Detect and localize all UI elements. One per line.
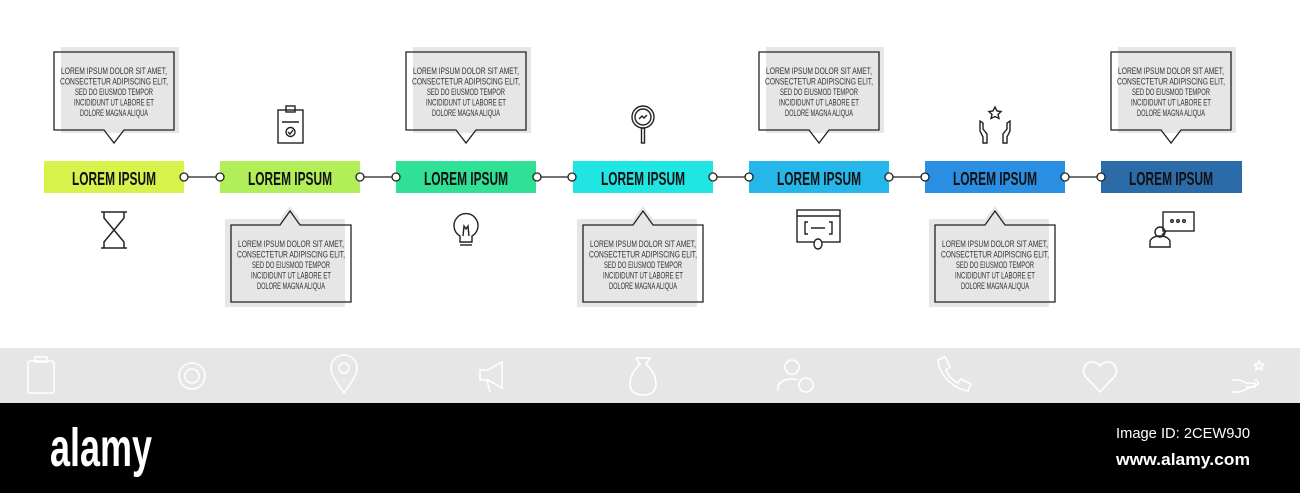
icon: certificate xyxy=(797,210,840,249)
callout top 3: SED DO EIUSMOD TEMPOR xyxy=(427,87,505,97)
callout top 3: CONSECTETUR ADIPISCING ELIT, xyxy=(412,76,520,86)
step 1 bar: LOREM IPSUM xyxy=(72,169,156,189)
callout top 5: INCIDIDUNT UT LABORE ET xyxy=(779,98,859,108)
callout top 7: CONSECTETUR ADIPISCING ELIT, xyxy=(1117,76,1225,86)
step 7 bar xyxy=(1101,161,1242,193)
callout top 5 xyxy=(759,47,884,143)
footer: alamy watermark bar: www.alamy.com xyxy=(1115,450,1250,469)
step 1 bar xyxy=(44,161,184,193)
callout top 3 xyxy=(406,47,531,143)
callout bottom 2: SED DO EIUSMOD TEMPOR xyxy=(252,260,330,270)
callout bottom 2: DOLORE MAGNA ALIQUA xyxy=(257,281,325,291)
callout top 5: LOREM IPSUM DOLOR SIT AMET, xyxy=(766,66,872,76)
step 3 bar: LOREM IPSUM xyxy=(424,169,508,189)
callout bottom 6: INCIDIDUNT UT LABORE ET xyxy=(955,270,1035,280)
callout top 3: INCIDIDUNT UT LABORE ET xyxy=(426,98,506,108)
callout top 7: SED DO EIUSMOD TEMPOR xyxy=(1132,87,1210,97)
step 5 bar xyxy=(749,161,889,193)
step 4 bar: LOREM IPSUM xyxy=(601,169,685,189)
callout bottom 2 xyxy=(225,206,351,307)
step 2 bar: LOREM IPSUM xyxy=(248,169,332,189)
step 5 bar: LOREM IPSUM xyxy=(777,169,861,189)
step 6 bar xyxy=(925,161,1065,193)
callout top 5: DOLORE MAGNA ALIQUA xyxy=(785,108,853,118)
step 6 bar: LOREM IPSUM xyxy=(953,169,1037,189)
icon: clipboard xyxy=(278,106,303,143)
callout top 1: DOLORE MAGNA ALIQUA xyxy=(80,108,148,118)
callout bottom 6: SED DO EIUSMOD TEMPOR xyxy=(956,260,1034,270)
callout bottom 6 xyxy=(929,206,1055,307)
callout top 7 xyxy=(1111,47,1236,143)
footer: alamy watermark bar: alamy xyxy=(50,418,152,478)
callout bottom 4: INCIDIDUNT UT LABORE ET xyxy=(603,270,683,280)
connector nodes xyxy=(180,173,1105,181)
callout bottom 2: INCIDIDUNT UT LABORE ET xyxy=(251,270,331,280)
callout top 3: DOLORE MAGNA ALIQUA xyxy=(432,108,500,118)
icon: light bulb xyxy=(454,214,478,245)
icon: hourglass xyxy=(101,212,127,248)
icon: hands star xyxy=(980,107,1010,143)
callout bottom 4: LOREM IPSUM DOLOR SIT AMET, xyxy=(590,239,696,249)
step 7 bar: LOREM IPSUM xyxy=(1129,169,1213,189)
callout top 1: INCIDIDUNT UT LABORE ET xyxy=(74,98,154,108)
callout top 1 xyxy=(54,47,179,143)
callout bottom 4: CONSECTETUR ADIPISCING ELIT, xyxy=(589,250,697,260)
callout bottom 4: SED DO EIUSMOD TEMPOR xyxy=(604,260,682,270)
footer: alamy watermark bar xyxy=(0,403,1300,493)
callout top 1: SED DO EIUSMOD TEMPOR xyxy=(75,87,153,97)
callout top 1: CONSECTETUR ADIPISCING ELIT, xyxy=(60,76,168,86)
callout bottom 6: LOREM IPSUM DOLOR SIT AMET, xyxy=(942,239,1048,249)
connector line xyxy=(184,176,1101,178)
footer: alamy watermark bar: Image ID: 2CEW9J0 xyxy=(1116,425,1250,442)
step 4 bar xyxy=(573,161,713,193)
callout bottom 6: DOLORE MAGNA ALIQUA xyxy=(961,281,1029,291)
step 3 bar xyxy=(396,161,536,193)
callout top 3: LOREM IPSUM DOLOR SIT AMET, xyxy=(413,66,519,76)
callout top 7: INCIDIDUNT UT LABORE ET xyxy=(1131,98,1211,108)
icon: user chat xyxy=(1150,212,1194,247)
callout bottom 4 xyxy=(577,206,703,307)
callout top 7: LOREM IPSUM DOLOR SIT AMET, xyxy=(1118,66,1224,76)
bottom icon band xyxy=(0,348,1300,403)
step 2 bar xyxy=(220,161,360,193)
callout top 1: LOREM IPSUM DOLOR SIT AMET, xyxy=(61,66,167,76)
callout bottom 2: LOREM IPSUM DOLOR SIT AMET, xyxy=(238,239,344,249)
callout top 7: DOLORE MAGNA ALIQUA xyxy=(1137,108,1205,118)
callout bottom 4: DOLORE MAGNA ALIQUA xyxy=(609,281,677,291)
callout top 5: CONSECTETUR ADIPISCING ELIT, xyxy=(765,76,873,86)
callout top 5: SED DO EIUSMOD TEMPOR xyxy=(780,87,858,97)
icon: magnifier xyxy=(632,106,654,143)
callout bottom 6: CONSECTETUR ADIPISCING ELIT, xyxy=(941,250,1049,260)
callout bottom 2: CONSECTETUR ADIPISCING ELIT, xyxy=(237,250,345,260)
